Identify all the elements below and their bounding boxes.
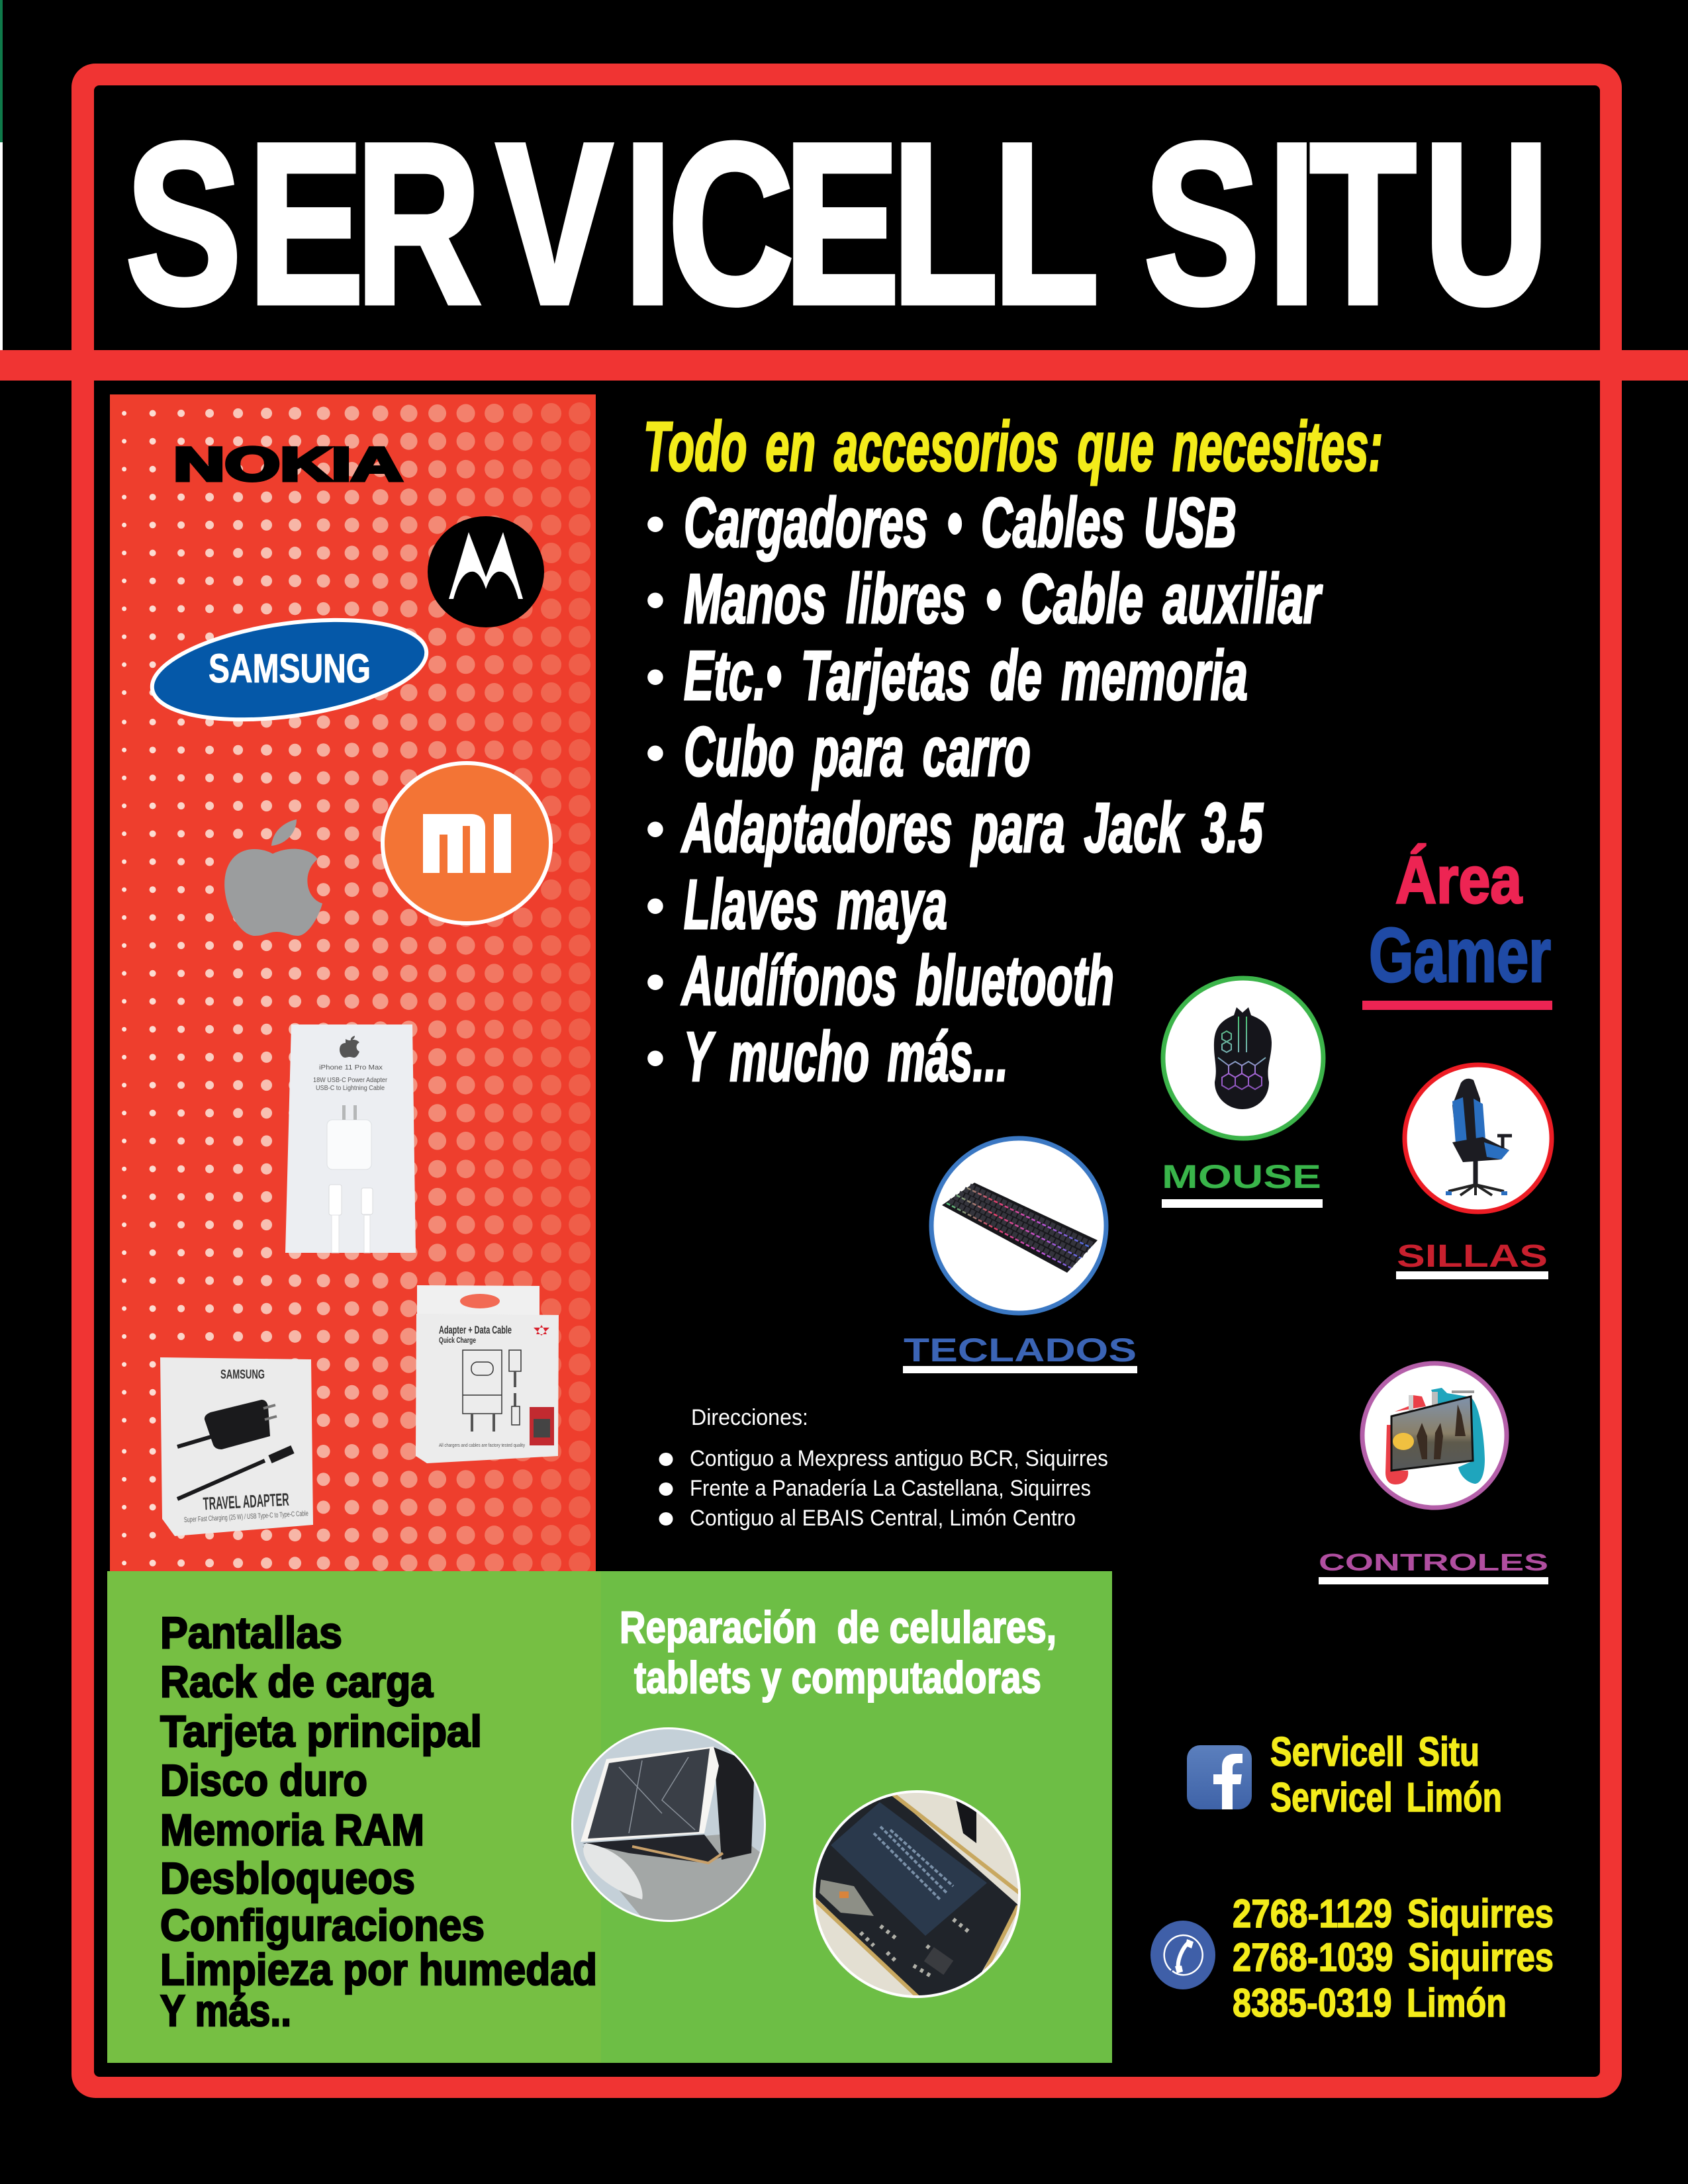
list: accesorios: Llaves maya <box>684 866 947 944</box>
logo: Nokia: NOKIA <box>173 439 402 491</box>
product: Samsung travel adapter box: TRAVEL ADAPTER <box>203 1490 289 1514</box>
red header band <box>0 350 1688 381</box>
item: teclados <box>903 1138 1137 1373</box>
contact: facebook: Servicel Limón <box>1270 1775 1502 1821</box>
list: accesorios: • <box>646 799 665 859</box>
panel: reparación <box>107 1571 1112 2063</box>
item: controles <box>1319 1363 1548 1584</box>
list: accesorios: Cubo para carro <box>684 713 1031 791</box>
logo: Xiaomi Mi <box>383 763 551 923</box>
text block: direcciones: Direcciones: <box>691 1405 808 1430</box>
panel: brands and chargers <box>110 394 596 1579</box>
text block: direcciones: Contiguo al EBAIS Central, Limón Centro <box>690 1506 1076 1531</box>
contact: facebook: Servicell Situ <box>1270 1729 1479 1775</box>
list: servicios de reparación: Y más.. <box>160 1986 291 2036</box>
list: accesorios: Etc.• Tarjetas de memoria <box>684 637 1248 715</box>
item: sillas <box>1396 1065 1552 1279</box>
heading: reparación de celulares: tablets y computadoras <box>634 1653 1041 1703</box>
photo: pantalla rota <box>569 1721 768 1926</box>
logo: Motorola <box>428 516 544 627</box>
contact: teléfonos: 2768-1039 Siquirres <box>1233 1935 1554 1979</box>
list: servicios de reparación: Desbloqueos <box>160 1854 415 1903</box>
list: accesorios: • <box>646 1028 665 1088</box>
list: accesorios: • <box>646 494 665 554</box>
title: SERVICELL SITU <box>126 96 1549 351</box>
heading: reparación de celulares: Reparación de celulares, <box>620 1602 1056 1653</box>
list: accesorios: Adaptadores para Jack 3.5 <box>680 789 1264 867</box>
list: accesorios: • <box>646 570 665 630</box>
label: CONTROLES: CONTROLES <box>1319 1549 1548 1576</box>
product: iPhone charger box <box>285 1024 416 1253</box>
icon: phone <box>1150 1921 1215 1989</box>
product: Huawei adapter box: Adapter + Data Cable <box>439 1324 512 1336</box>
contact: teléfonos: 2768-1129 Siquirres <box>1233 1891 1554 1936</box>
logo: Samsung: SAMSUNG <box>209 646 371 691</box>
list: accesorios: Audífonos bluetooth <box>680 942 1114 1020</box>
product: iPhone charger box: USB-C to Lightning Cable <box>316 1085 385 1092</box>
list: accesorios: Y mucho más... <box>684 1018 1008 1096</box>
list: accesorios: • <box>646 647 665 707</box>
product: Samsung travel adapter box: Super Fast Charging (25 W) / USB Type-C to Type-C Cable <box>184 1510 308 1524</box>
edge strip <box>0 0 3 350</box>
list: accesorios: Cargadores • Cables USB <box>684 484 1237 562</box>
text block: direcciones <box>659 1405 1108 1531</box>
halftone dots <box>124 413 580 1565</box>
list: accesorios: • <box>646 952 665 1012</box>
contact: facebook <box>1187 1729 1502 1821</box>
heading: Área Gamer <box>1362 843 1552 1010</box>
heading: Área Gamer: Gamer <box>1369 912 1551 998</box>
list: servicios de reparación <box>160 1608 597 2036</box>
product: Samsung travel adapter box: SAMSUNG <box>220 1368 265 1382</box>
list: servicios de reparación: Pantallas <box>160 1608 342 1658</box>
list: servicios de reparación: Tarjeta principal <box>160 1707 482 1756</box>
list: servicios de reparación: Memoria RAM <box>160 1805 424 1855</box>
item: mouse <box>1162 978 1323 1208</box>
icon: facebook <box>1187 1745 1252 1809</box>
product: iPhone charger box: iPhone 11 Pro Max <box>319 1064 383 1071</box>
list: servicios de reparación: Disco duro <box>160 1756 367 1805</box>
product: Huawei adapter box <box>416 1285 559 1463</box>
icon: gaming mouse <box>1214 1007 1272 1109</box>
heading: Área Gamer: Área <box>1395 843 1523 917</box>
label: TECLADOS: TECLADOS <box>904 1332 1137 1369</box>
text block: direcciones: Contiguo a Mexpress antiguo BCR, Siquirres <box>690 1446 1108 1471</box>
contact: teléfonos: 8385-0319 Limón <box>1233 1981 1507 2025</box>
list: accesorios: • <box>646 723 665 783</box>
list: servicios de reparación: Limpieza por humedad <box>160 1945 597 1995</box>
list: servicios de reparación: Rack de carga <box>160 1657 434 1707</box>
list: accesorios: • <box>646 876 665 936</box>
product: Huawei adapter box: All chargers and cables are factory tested quality <box>439 1443 525 1448</box>
icon: keyboard <box>942 1183 1098 1273</box>
icon: phone game controller <box>1385 1388 1485 1484</box>
list: accesorios: Manos libres • Cable auxiliar <box>684 560 1323 638</box>
product: Huawei adapter box: Quick Charge <box>439 1336 476 1345</box>
list: servicios de reparación: Configuraciones <box>160 1901 485 1950</box>
logo: Apple <box>224 819 322 936</box>
contact: teléfonos <box>1150 1891 1554 2025</box>
list: accesorios <box>646 484 1323 1096</box>
label: MOUSE: MOUSE <box>1162 1158 1321 1195</box>
text block: direcciones: Frente a Panadería La Castellana, Siquirres <box>690 1476 1091 1501</box>
logo: Samsung <box>146 605 433 735</box>
label: SILLAS: SILLAS <box>1397 1239 1548 1274</box>
product: iPhone charger box: 18W USB-C Power Adapter <box>313 1077 388 1084</box>
icon: gaming chair <box>1446 1079 1512 1195</box>
heading: reparación de celulares <box>620 1602 1056 1703</box>
photo: batería y placa <box>811 1787 1023 2005</box>
product: Samsung travel adapter box <box>160 1357 313 1536</box>
